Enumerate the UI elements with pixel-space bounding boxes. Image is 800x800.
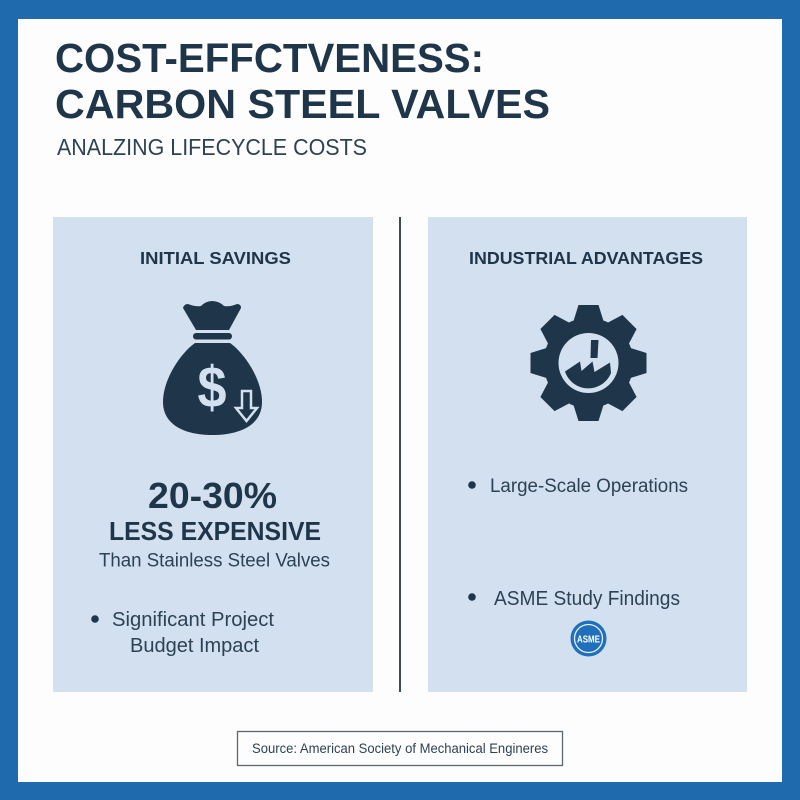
source box — [238, 732, 562, 766]
stat caption: Than Stainless Steel Valves — [99, 550, 330, 572]
bullet: project budget impact: Budget Impact — [130, 635, 259, 657]
icon: money bag: $ — [198, 355, 226, 420]
bullet: project budget impact: Significant Project — [112, 609, 274, 631]
stat label: LESS EXPENSIVE — [109, 518, 321, 546]
icon: money bag — [163, 301, 262, 435]
title — [55, 35, 550, 127]
title: COST-EFFCTVENESS: — [55, 35, 484, 81]
panel: initial savings — [53, 217, 373, 692]
divider — [399, 217, 401, 692]
bullet: asme study findings: ASME Study Findings — [494, 588, 680, 610]
heading: initial savings: INITIAL SAVINGS — [140, 248, 291, 268]
source box: Source: American Society of Mechanical Engineres — [252, 741, 548, 756]
panel: industrial advantages — [428, 217, 747, 692]
subtitle: ANALZING LIFECYCLE COSTS — [57, 134, 367, 160]
bullet: project budget impact — [91, 609, 274, 657]
title: CARBON STEEL VALVES — [55, 81, 550, 127]
heading: industrial advantages: INDUSTRIAL ADVANTAGES — [469, 248, 703, 268]
icon: ASME logo: ASME — [577, 634, 600, 646]
icon: gear with factory — [530, 305, 646, 421]
stat: 20-30%: 20-30% — [148, 475, 277, 516]
icon: ASME logo — [570, 620, 606, 656]
bullet: large-scale operations: Large-Scale Operations — [490, 476, 688, 497]
